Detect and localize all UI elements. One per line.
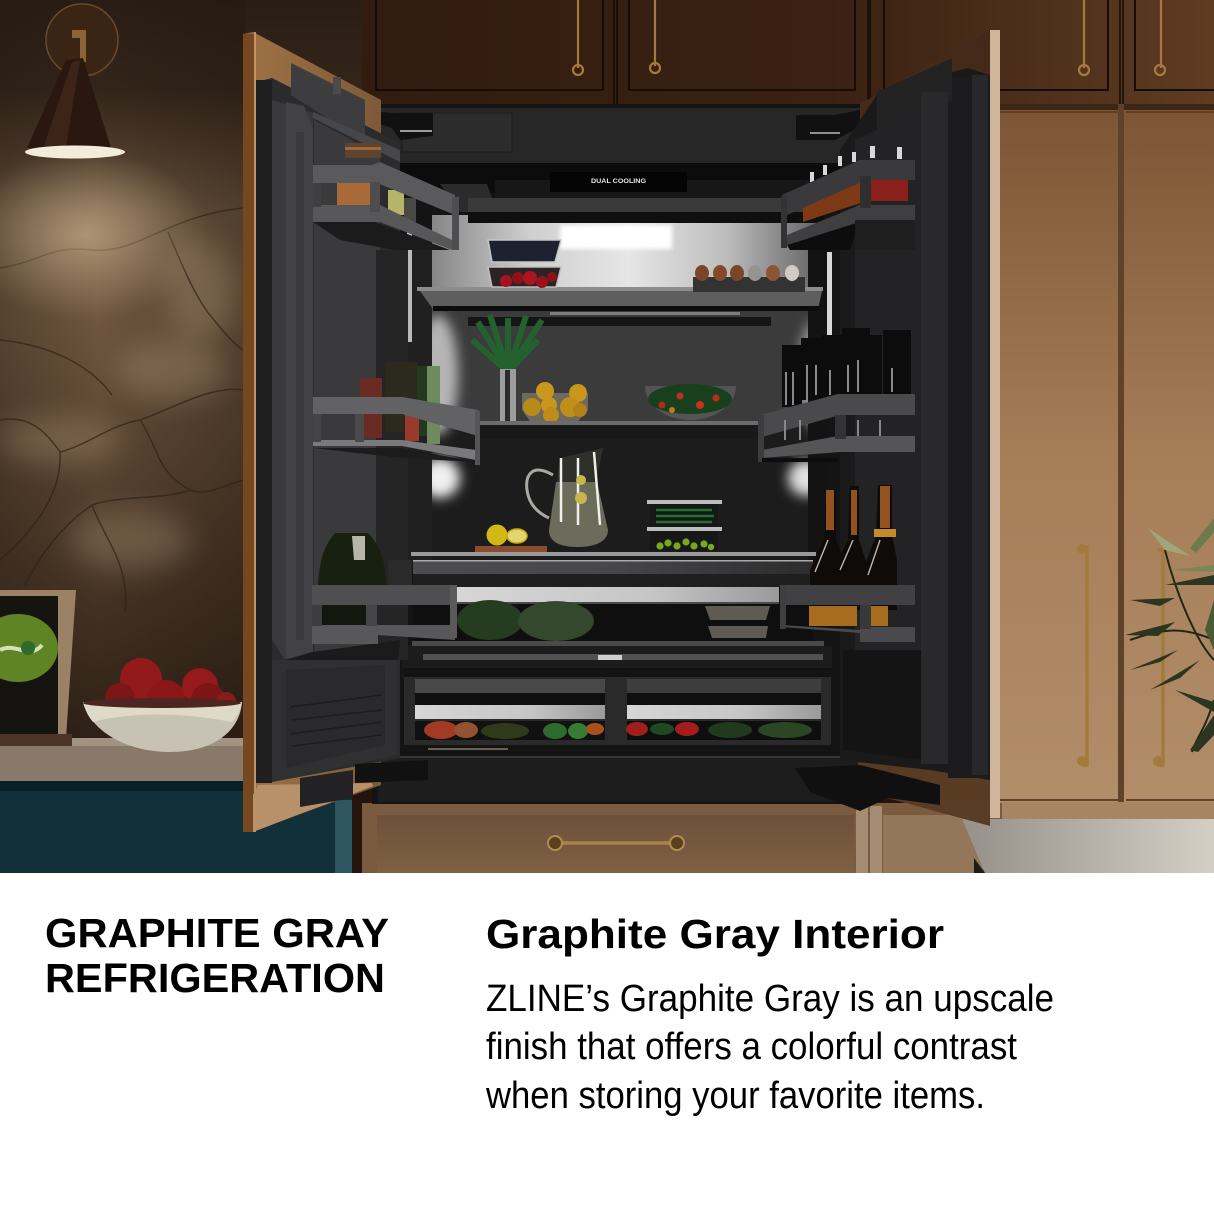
right counter — [962, 819, 1214, 873]
framed picture — [0, 590, 76, 746]
door shell — [256, 78, 400, 783]
inner liner — [314, 120, 380, 660]
cabbages — [457, 600, 523, 640]
lamp glow on wall — [0, 150, 210, 320]
egg tray — [693, 265, 805, 292]
heading: graphite gray refrigeration: REFRIGERATION — [45, 955, 385, 1001]
produce containers — [705, 606, 770, 638]
hinges — [367, 111, 433, 140]
middle bin — [758, 394, 915, 462]
bowl of apples — [83, 658, 242, 752]
middle glass shelf — [480, 421, 758, 439]
cut lemons on board — [475, 524, 547, 553]
wood panel — [243, 32, 381, 832]
top bin — [313, 162, 459, 250]
inner frame — [272, 100, 313, 660]
description text: ZLINE’s Graphite Gray is an upscale — [486, 978, 1054, 1020]
bottom bin — [312, 585, 457, 644]
right door — [795, 30, 1000, 826]
left counter and base cabinet — [0, 738, 352, 873]
left door bins — [312, 143, 480, 644]
side posts — [408, 230, 432, 560]
bottom bin — [780, 585, 915, 642]
lemons — [522, 382, 588, 423]
gasket block — [291, 63, 365, 142]
gasket block — [877, 58, 952, 135]
wood panel — [858, 30, 990, 826]
control panel — [402, 646, 833, 678]
top bin — [781, 160, 915, 250]
bottom toe kick — [378, 756, 868, 802]
crisper top and drawer — [411, 552, 824, 646]
door shell — [840, 68, 990, 780]
herb plant in vase — [472, 315, 542, 422]
wine bottles — [809, 485, 897, 626]
middle bin — [313, 397, 480, 465]
water bottles — [782, 328, 911, 407]
dark jar — [318, 533, 412, 626]
salad bowl — [645, 384, 736, 420]
marble wall — [0, 0, 370, 760]
jars top — [337, 143, 416, 222]
panel: kitchen photo — [0, 0, 1214, 873]
olive branch plant — [1125, 518, 1214, 752]
upper glass shelf — [417, 287, 823, 326]
tall oak cabinets — [995, 104, 1214, 819]
description text: when storing your favorite items. — [485, 1075, 985, 1117]
lemonade pitcher — [527, 448, 608, 547]
top header — [367, 108, 870, 223]
jars middle — [360, 362, 440, 444]
description text: finish that offers a colorful contrast — [486, 1026, 1017, 1068]
right door bins — [758, 146, 915, 642]
description text — [485, 978, 1054, 1117]
heading: graphite gray refrigeration — [45, 910, 389, 1001]
dual cooling label: DUAL COOLING — [591, 178, 646, 185]
left door — [243, 32, 428, 832]
back wall — [432, 215, 816, 512]
food containers — [647, 500, 722, 551]
subheading: Graphite Gray Interior — [486, 911, 944, 957]
lower drawers — [404, 677, 831, 745]
refrigerator interior — [367, 104, 870, 804]
lower door panel — [272, 650, 397, 782]
heading: graphite gray refrigeration: GRAPHITE GRAY — [45, 910, 389, 956]
door hinge bottom — [300, 770, 353, 807]
vegetables and fruit in drawers — [424, 721, 458, 739]
cabinet handles — [1082, 547, 1163, 765]
base drawer — [362, 803, 1002, 873]
wall sconce lamp — [25, 4, 125, 158]
sauce bottles — [803, 146, 908, 222]
upper cabinets — [362, 0, 1214, 108]
right hinge bottom — [795, 765, 940, 811]
white text area — [0, 873, 1214, 1214]
blueberry and strawberry containers — [488, 240, 561, 288]
